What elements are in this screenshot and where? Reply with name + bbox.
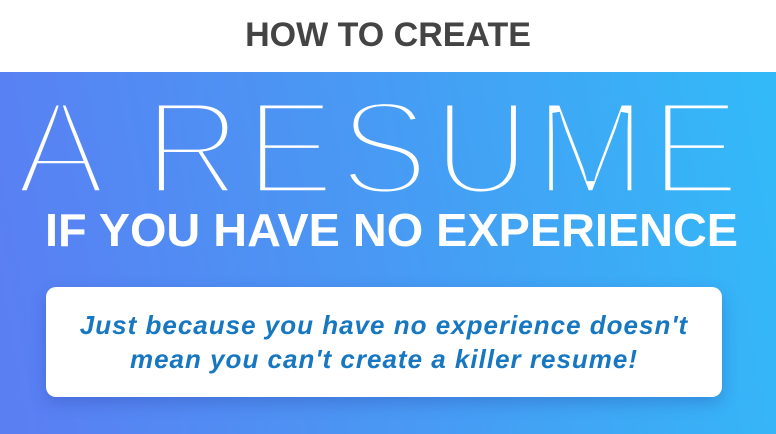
callout text — [80, 310, 688, 374]
heading: how to create: HOW TO CREATE — [245, 16, 531, 54]
title: A RESUME: A RESUME — [16, 74, 740, 223]
callout box: Just because you have no experience doesn't — [80, 310, 688, 340]
header band — [0, 0, 776, 72]
callout box: mean you can't create a killer resume! — [130, 344, 638, 374]
subtitle: if you have no experience: IF YOU HAVE NO EXPERIENCE — [45, 204, 738, 256]
callout box — [46, 287, 722, 397]
